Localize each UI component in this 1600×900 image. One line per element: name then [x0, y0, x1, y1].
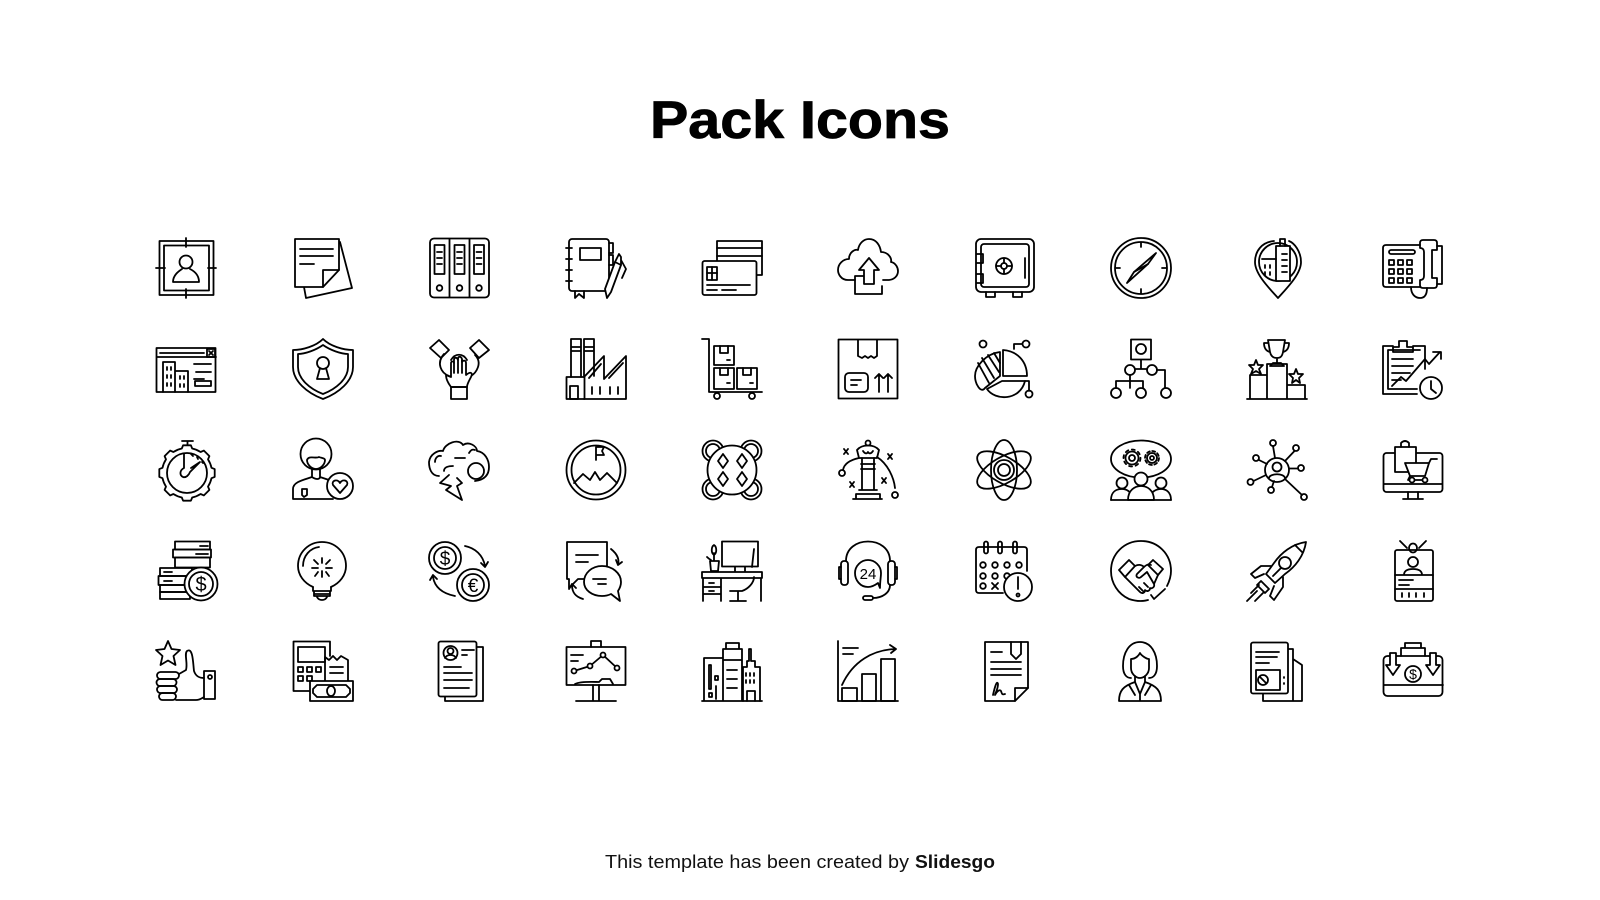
icon: pie chart — [975, 340, 1032, 398]
icon: network person — [1248, 440, 1307, 500]
icon: businesswoman — [1119, 642, 1161, 701]
icon: cloud upload — [838, 239, 898, 294]
icon: light bulb — [298, 542, 346, 600]
icon: four circles — [702, 440, 762, 500]
icon: masked person with heart — [293, 438, 353, 499]
icon: security shield — [293, 339, 353, 399]
icon: document folder — [1251, 642, 1302, 701]
icon: safe — [976, 239, 1034, 297]
icon: stopwatch gear — [159, 441, 215, 501]
icon: notebook and pen — [566, 239, 626, 298]
icon: teamwork hands — [430, 340, 489, 399]
icon: binders — [430, 238, 489, 298]
icon: brain storm — [429, 442, 489, 500]
icon: clipboard growth — [1383, 341, 1442, 399]
icon: signed contract — [985, 642, 1028, 701]
icon: handshake circle — [1111, 541, 1171, 601]
icon: cart with boxes — [702, 339, 762, 399]
icon: credit cards — [702, 241, 762, 295]
icon: money stacks — [158, 542, 218, 600]
icon: factory — [566, 339, 626, 399]
icon: monitor shopping — [1384, 441, 1442, 499]
icon: office desk — [702, 542, 762, 601]
icon: 24h headset: 24 — [860, 566, 876, 583]
icon: chess strategy — [839, 440, 898, 499]
icon: target person — [156, 238, 216, 298]
icon: currency exchange — [429, 542, 489, 601]
icon: ID badge — [1395, 541, 1433, 601]
icon: telephone — [1383, 240, 1442, 298]
icon: podium with trophy — [1247, 340, 1307, 399]
footer credit: This template has been created by — [605, 851, 910, 872]
icon: browser with buildings — [156, 348, 216, 392]
icon: city location pin — [1255, 239, 1301, 298]
icon: chat exchange — [567, 542, 622, 601]
icon: presentation board — [566, 641, 626, 701]
icon: rocket — [1247, 542, 1306, 601]
icon: package box — [838, 340, 898, 398]
icon: growth bar chart — [838, 641, 898, 701]
icon: org chart — [1111, 340, 1171, 398]
icon: mountain flag circle — [566, 440, 626, 500]
icon: 24h headset — [839, 542, 897, 600]
icon: money briefcase — [1384, 643, 1443, 696]
icon: calculator and money — [294, 642, 353, 701]
icon: notes — [295, 239, 352, 298]
icon: atom — [972, 440, 1036, 500]
icon: team with gears — [1111, 440, 1171, 500]
icon: compass — [1111, 238, 1171, 298]
icon: thumbs up star — [156, 641, 215, 700]
icon: calendar alert — [976, 542, 1032, 601]
icon: city buildings — [702, 643, 762, 701]
icon: money stacks: $ — [195, 574, 207, 596]
title: Pack Icons — [650, 91, 950, 150]
icon: currency exchange: € — [468, 576, 479, 597]
footer credit: Slidesgo — [915, 851, 995, 872]
icon: currency exchange: $ — [440, 549, 451, 570]
icon: resume document — [438, 642, 483, 701]
icon: money briefcase: $ — [1409, 666, 1417, 682]
